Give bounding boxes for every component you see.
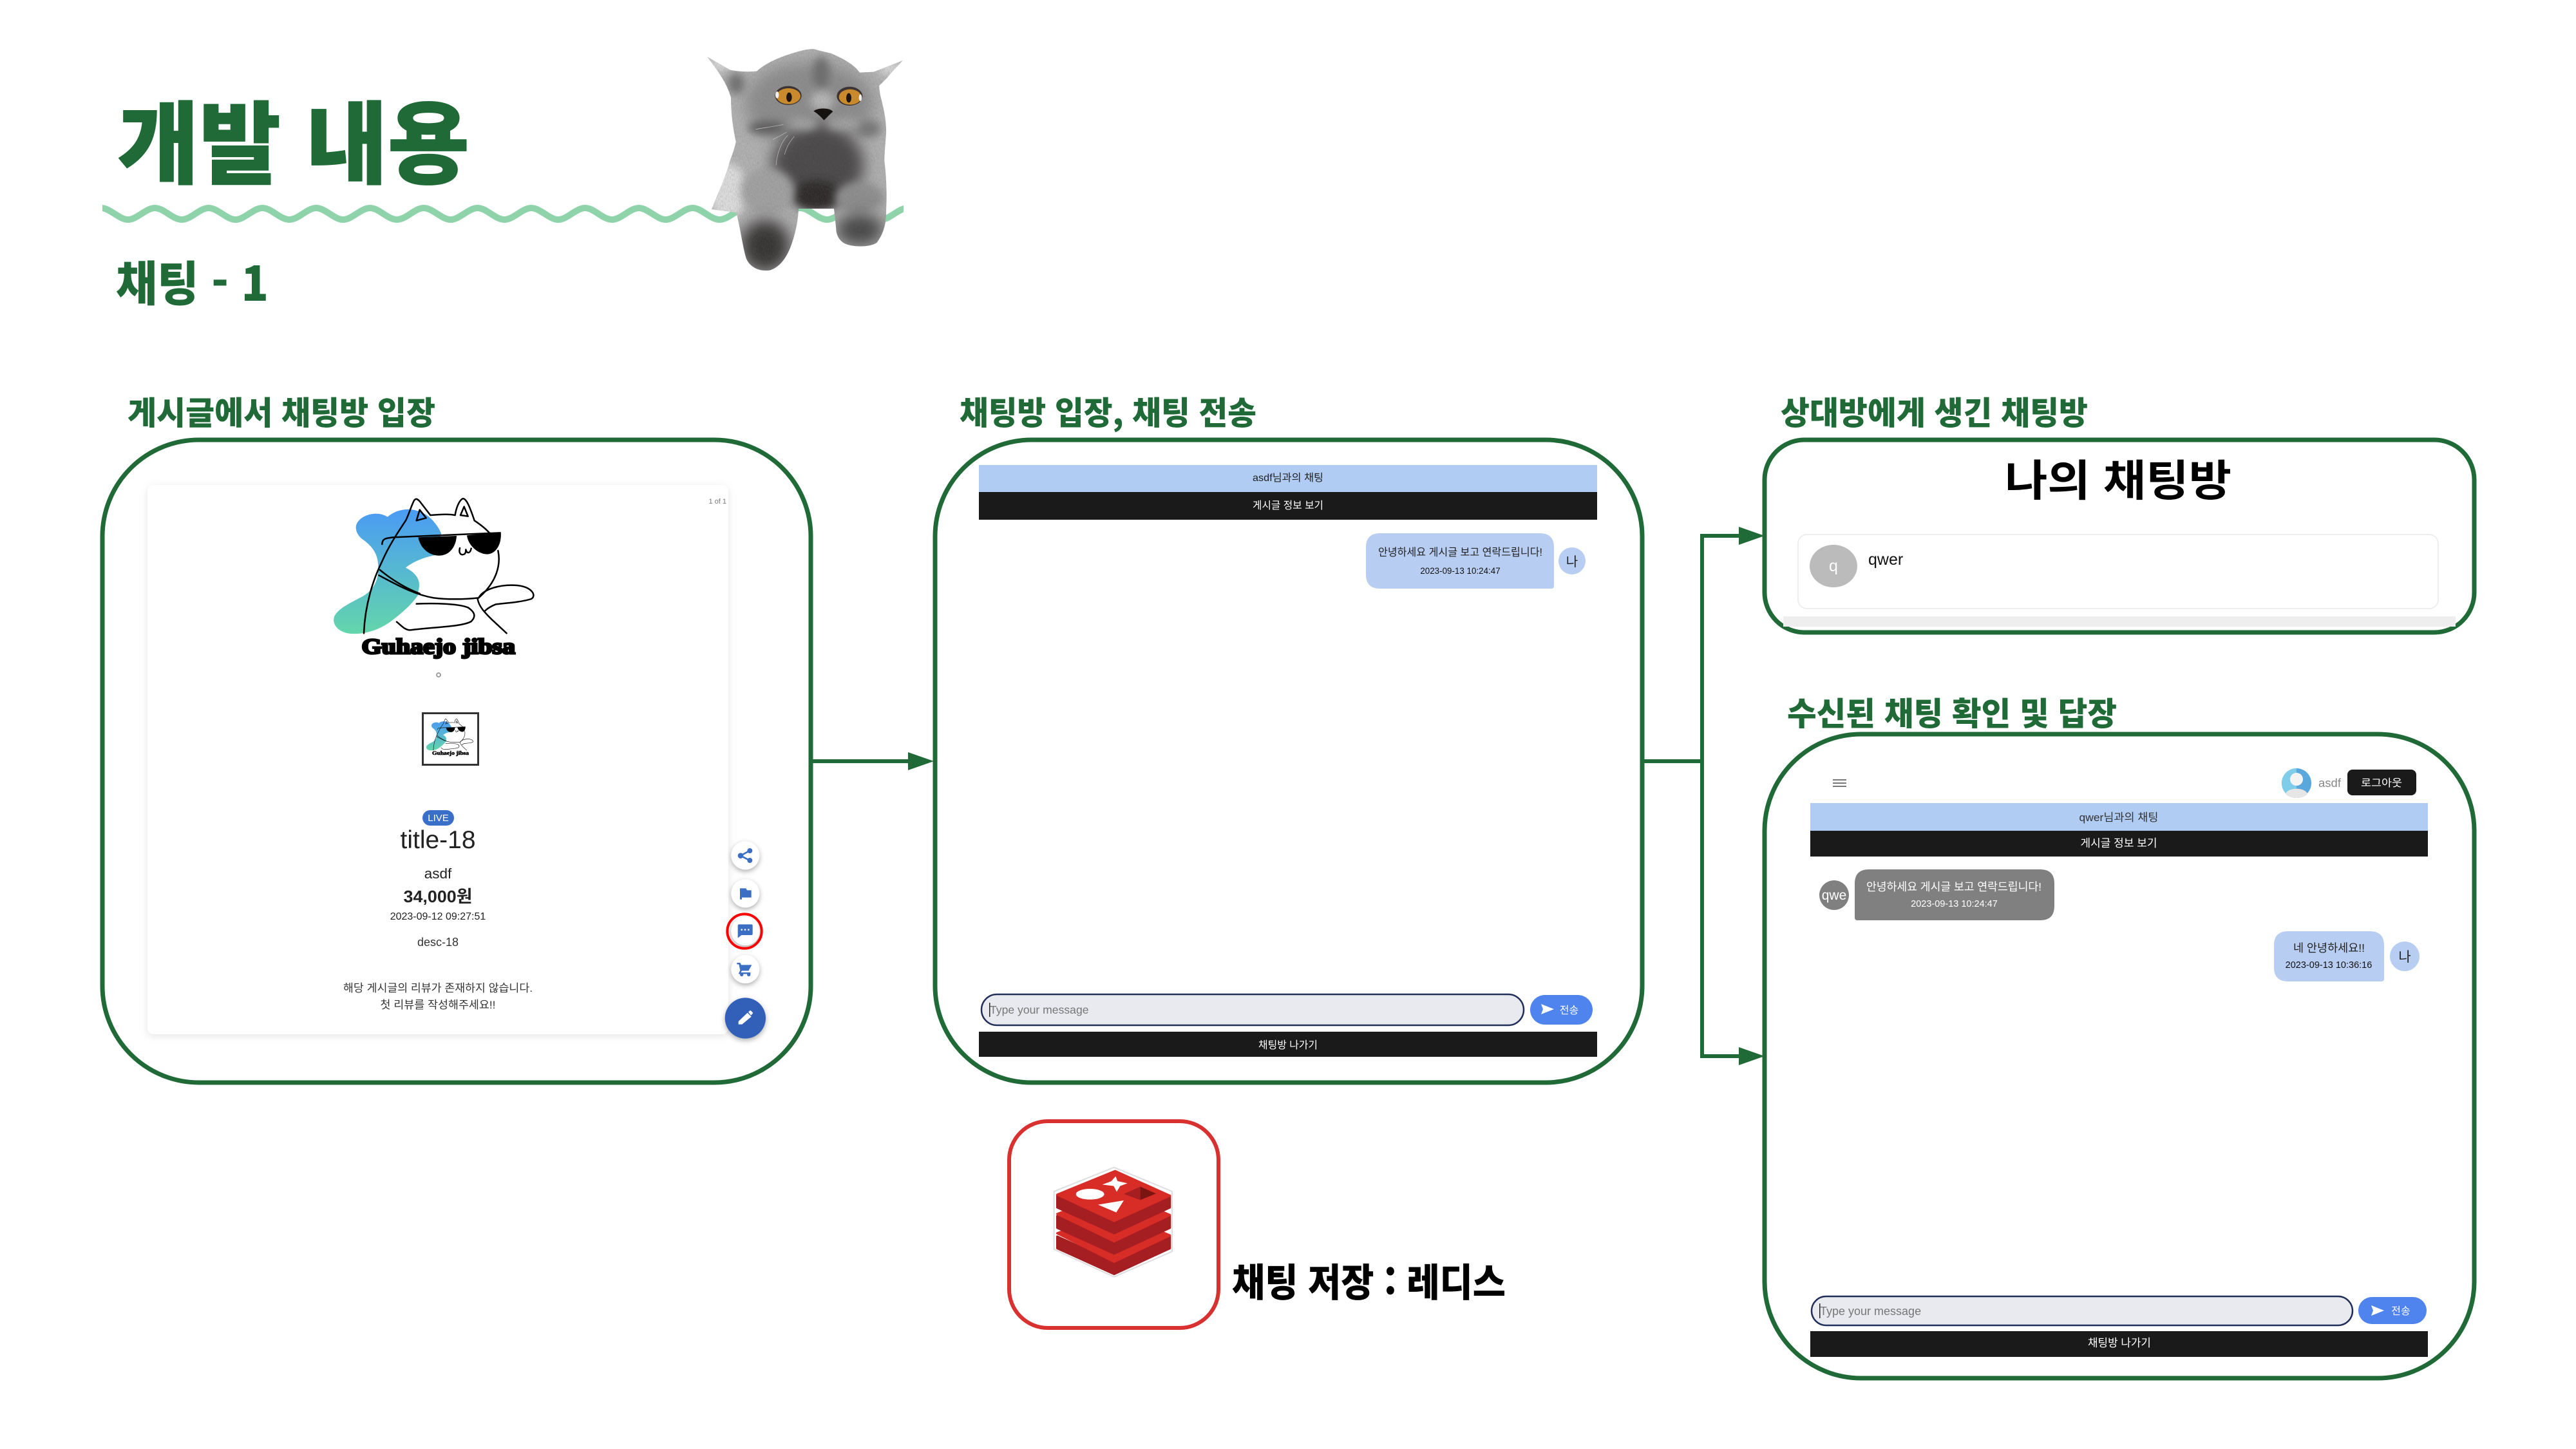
title: 개발 내용 [117,73,469,203]
action buttons [725,841,766,1039]
panel: receiver chat room [1765,734,2474,1378]
review empty message: 첫 리뷰를 작성해주세요!! [380,999,496,1011]
post info button: 게시글 정보 보기 [1253,500,1323,511]
post info button [1810,831,2428,857]
decorative wave under title [101,208,908,220]
sender avatar: qwe [1822,888,1846,903]
receiver avatar [2390,942,2420,971]
heading: panel 4: 수신된 채팅 확인 및 답장 [1787,688,2117,735]
reply bubble: 2023-09-13 10:36:16 [2286,960,2372,971]
send button [1530,995,1593,1025]
chat header: asdf님과의 채팅 [1253,472,1323,484]
received bubble [1855,869,2054,920]
send button: 전송 [1560,1005,1578,1016]
subtitle: 채팅 - 1 [116,246,269,315]
logo: Guhaejo jibsa cat: Guhaejo jibsa [362,635,515,659]
review empty message: 해당 게시글의 리뷰가 존재하지 않습니다. [343,982,533,994]
message input: Type your message [990,1003,1089,1016]
received bubble: 안녕하세요 게시글 보고 연락드립니다! [1866,880,2041,893]
chat list item [1798,535,2438,609]
thumbnail: Guhaejo jibsa [432,750,469,756]
seller: asdf [424,866,452,882]
message bubble: 안녕하세요 게시글 보고 연락드립니다! [1378,547,1542,558]
icon: share [731,841,759,869]
scroll bar [1783,616,2456,627]
description: desc-18 [417,936,459,949]
post title: title-18 [401,826,475,854]
icon: user avatar [2282,768,2311,798]
logo: Guhaejo jibsa cat [334,498,533,659]
panel: receiver chat list [1765,440,2474,632]
panel: sender chat room [935,440,1642,1083]
logout button: 로그아웃 [2361,777,2402,789]
icon: flag [731,879,759,907]
post date: 2023-09-12 09:27:51 [390,911,486,922]
icon: menu [1833,779,1846,787]
chat list item: q [1829,557,1838,575]
chat header [1810,803,2428,831]
icon: redis logo [1054,1168,1172,1277]
chat header [979,465,1597,492]
redis caption: 채팅 저장 : 레디스 [1232,1252,1506,1308]
reply bubble: 네 안녕하세요!! [2293,942,2365,954]
sender avatar [1558,547,1586,574]
price: 34,000원 [403,887,473,906]
panel: redis [1009,1121,1218,1328]
sender avatar [1819,880,1849,910]
received bubble: 2023-09-13 10:24:47 [1911,899,1998,909]
LIVE badge [422,810,454,826]
icon: chat button [727,914,762,949]
message bubble: 2023-09-13 10:24:47 [1420,566,1501,576]
leave button: 채팅방 나가기 [1258,1039,1318,1051]
chat list item: qwer [1868,551,1903,569]
receiver avatar: 나 [2398,950,2411,965]
icon: write button [725,998,766,1039]
send button [2358,1297,2427,1324]
message input [1812,1296,2353,1325]
post info button [979,492,1597,520]
sender avatar: 나 [1566,554,1578,569]
leave button: 채팅방 나가기 [2088,1337,2151,1349]
heading: panel 3: 상대방에게 생긴 채팅방 [1781,388,2088,434]
heading: panel 2: 채팅방 입장, 채팅 전송 [960,388,1256,434]
message input: Type your message [1820,1305,1921,1318]
thumbnail [422,714,478,765]
post info button: 게시글 정보 보기 [2080,837,2157,849]
reply bubble [2274,931,2384,981]
panel: post page [102,440,811,1083]
chat list title: 나의 채팅방 [2005,457,2231,506]
chat header: qwer님과의 채팅 [2079,811,2159,824]
icon: grey cat hanging over the wave [702,45,908,277]
user name: asdf [2318,776,2342,790]
arrow: post page to chat room [811,752,934,770]
arrow: chat room branching to both receiver screens [1642,527,1765,1065]
review empty message [343,982,533,1011]
message input [981,994,1524,1025]
image counter: 1 of 1 [708,498,726,506]
leave button [1810,1331,2428,1357]
heading: panel 1: 게시글에서 채팅방 입장 [128,388,435,434]
logout button [2347,770,2416,795]
icon: cart [731,955,759,983]
message bubble [1366,533,1554,589]
leave button [979,1032,1597,1057]
send button: 전송 [2391,1305,2410,1317]
carousel dot [437,673,440,677]
post card [147,485,728,1034]
LIVE badge: LIVE [428,813,449,824]
